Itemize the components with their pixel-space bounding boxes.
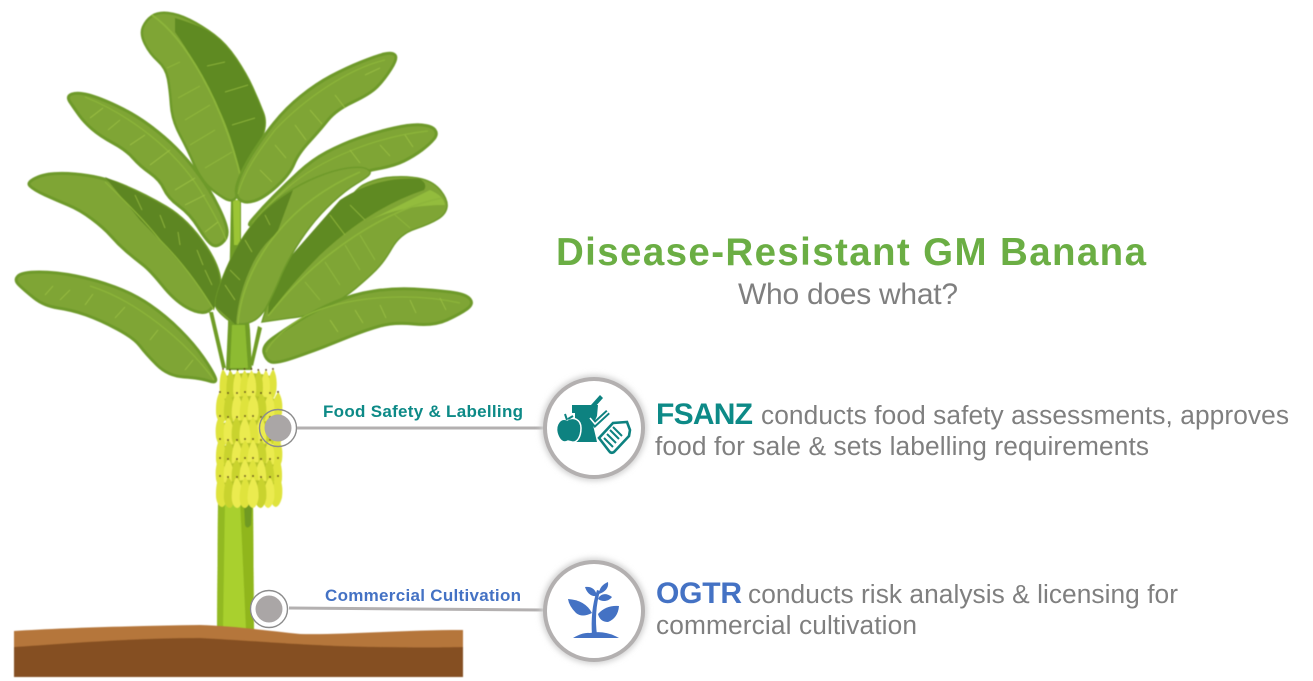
leaf: upper right bbox=[236, 53, 396, 202]
leaf: right bottom bbox=[264, 289, 471, 362]
text block: OGTR: conducts risk analysis & licensing for bbox=[748, 579, 1178, 609]
subtitle: Who does what? bbox=[738, 278, 958, 311]
ground bbox=[14, 625, 463, 677]
leaf: centre front bbox=[216, 167, 370, 325]
icon: tick bbox=[590, 412, 608, 424]
icon: cup bbox=[572, 405, 598, 442]
text block: FSANZ: conducts food safety assessments, approves bbox=[761, 400, 1289, 430]
text block: OGTR bbox=[656, 577, 1178, 640]
text block: OGTR: commercial cultivation bbox=[656, 610, 917, 640]
icon: food safety badge bbox=[541, 375, 647, 481]
label: food safety: Food Safety & Labelling bbox=[323, 402, 523, 421]
marker: soil bbox=[250, 590, 288, 628]
leaf: top centre bbox=[142, 13, 265, 200]
leaf: right narrow bbox=[247, 125, 436, 232]
title: Disease-Resistant GM Banana bbox=[556, 231, 1147, 274]
text block: OGTR: OGTR bbox=[656, 577, 742, 610]
text block: FSANZ bbox=[655, 398, 1289, 461]
icon: apple bbox=[557, 414, 581, 442]
text block: FSANZ: food for sale & sets labelling requirements bbox=[655, 431, 1149, 461]
connector: food safety bbox=[260, 410, 544, 446]
leaf: right large bbox=[262, 177, 447, 322]
leaf: left bottom bbox=[16, 272, 216, 382]
icon: tag bbox=[599, 422, 630, 453]
leaf: left middle bbox=[29, 173, 220, 312]
trunk bbox=[217, 500, 254, 630]
leaf: upper left bbox=[68, 93, 227, 246]
banana plant bbox=[16, 13, 471, 630]
label: commercial cultivation: Commercial Cultivation bbox=[325, 586, 521, 605]
banana bunch bbox=[214, 368, 284, 508]
marker: bunch bbox=[260, 410, 296, 446]
icon: seedling bbox=[568, 582, 619, 638]
upper stem bbox=[209, 200, 262, 370]
icon: plant badge bbox=[541, 558, 647, 664]
text block: FSANZ: FSANZ bbox=[656, 398, 753, 431]
connector: commercial cultivation bbox=[250, 590, 544, 628]
